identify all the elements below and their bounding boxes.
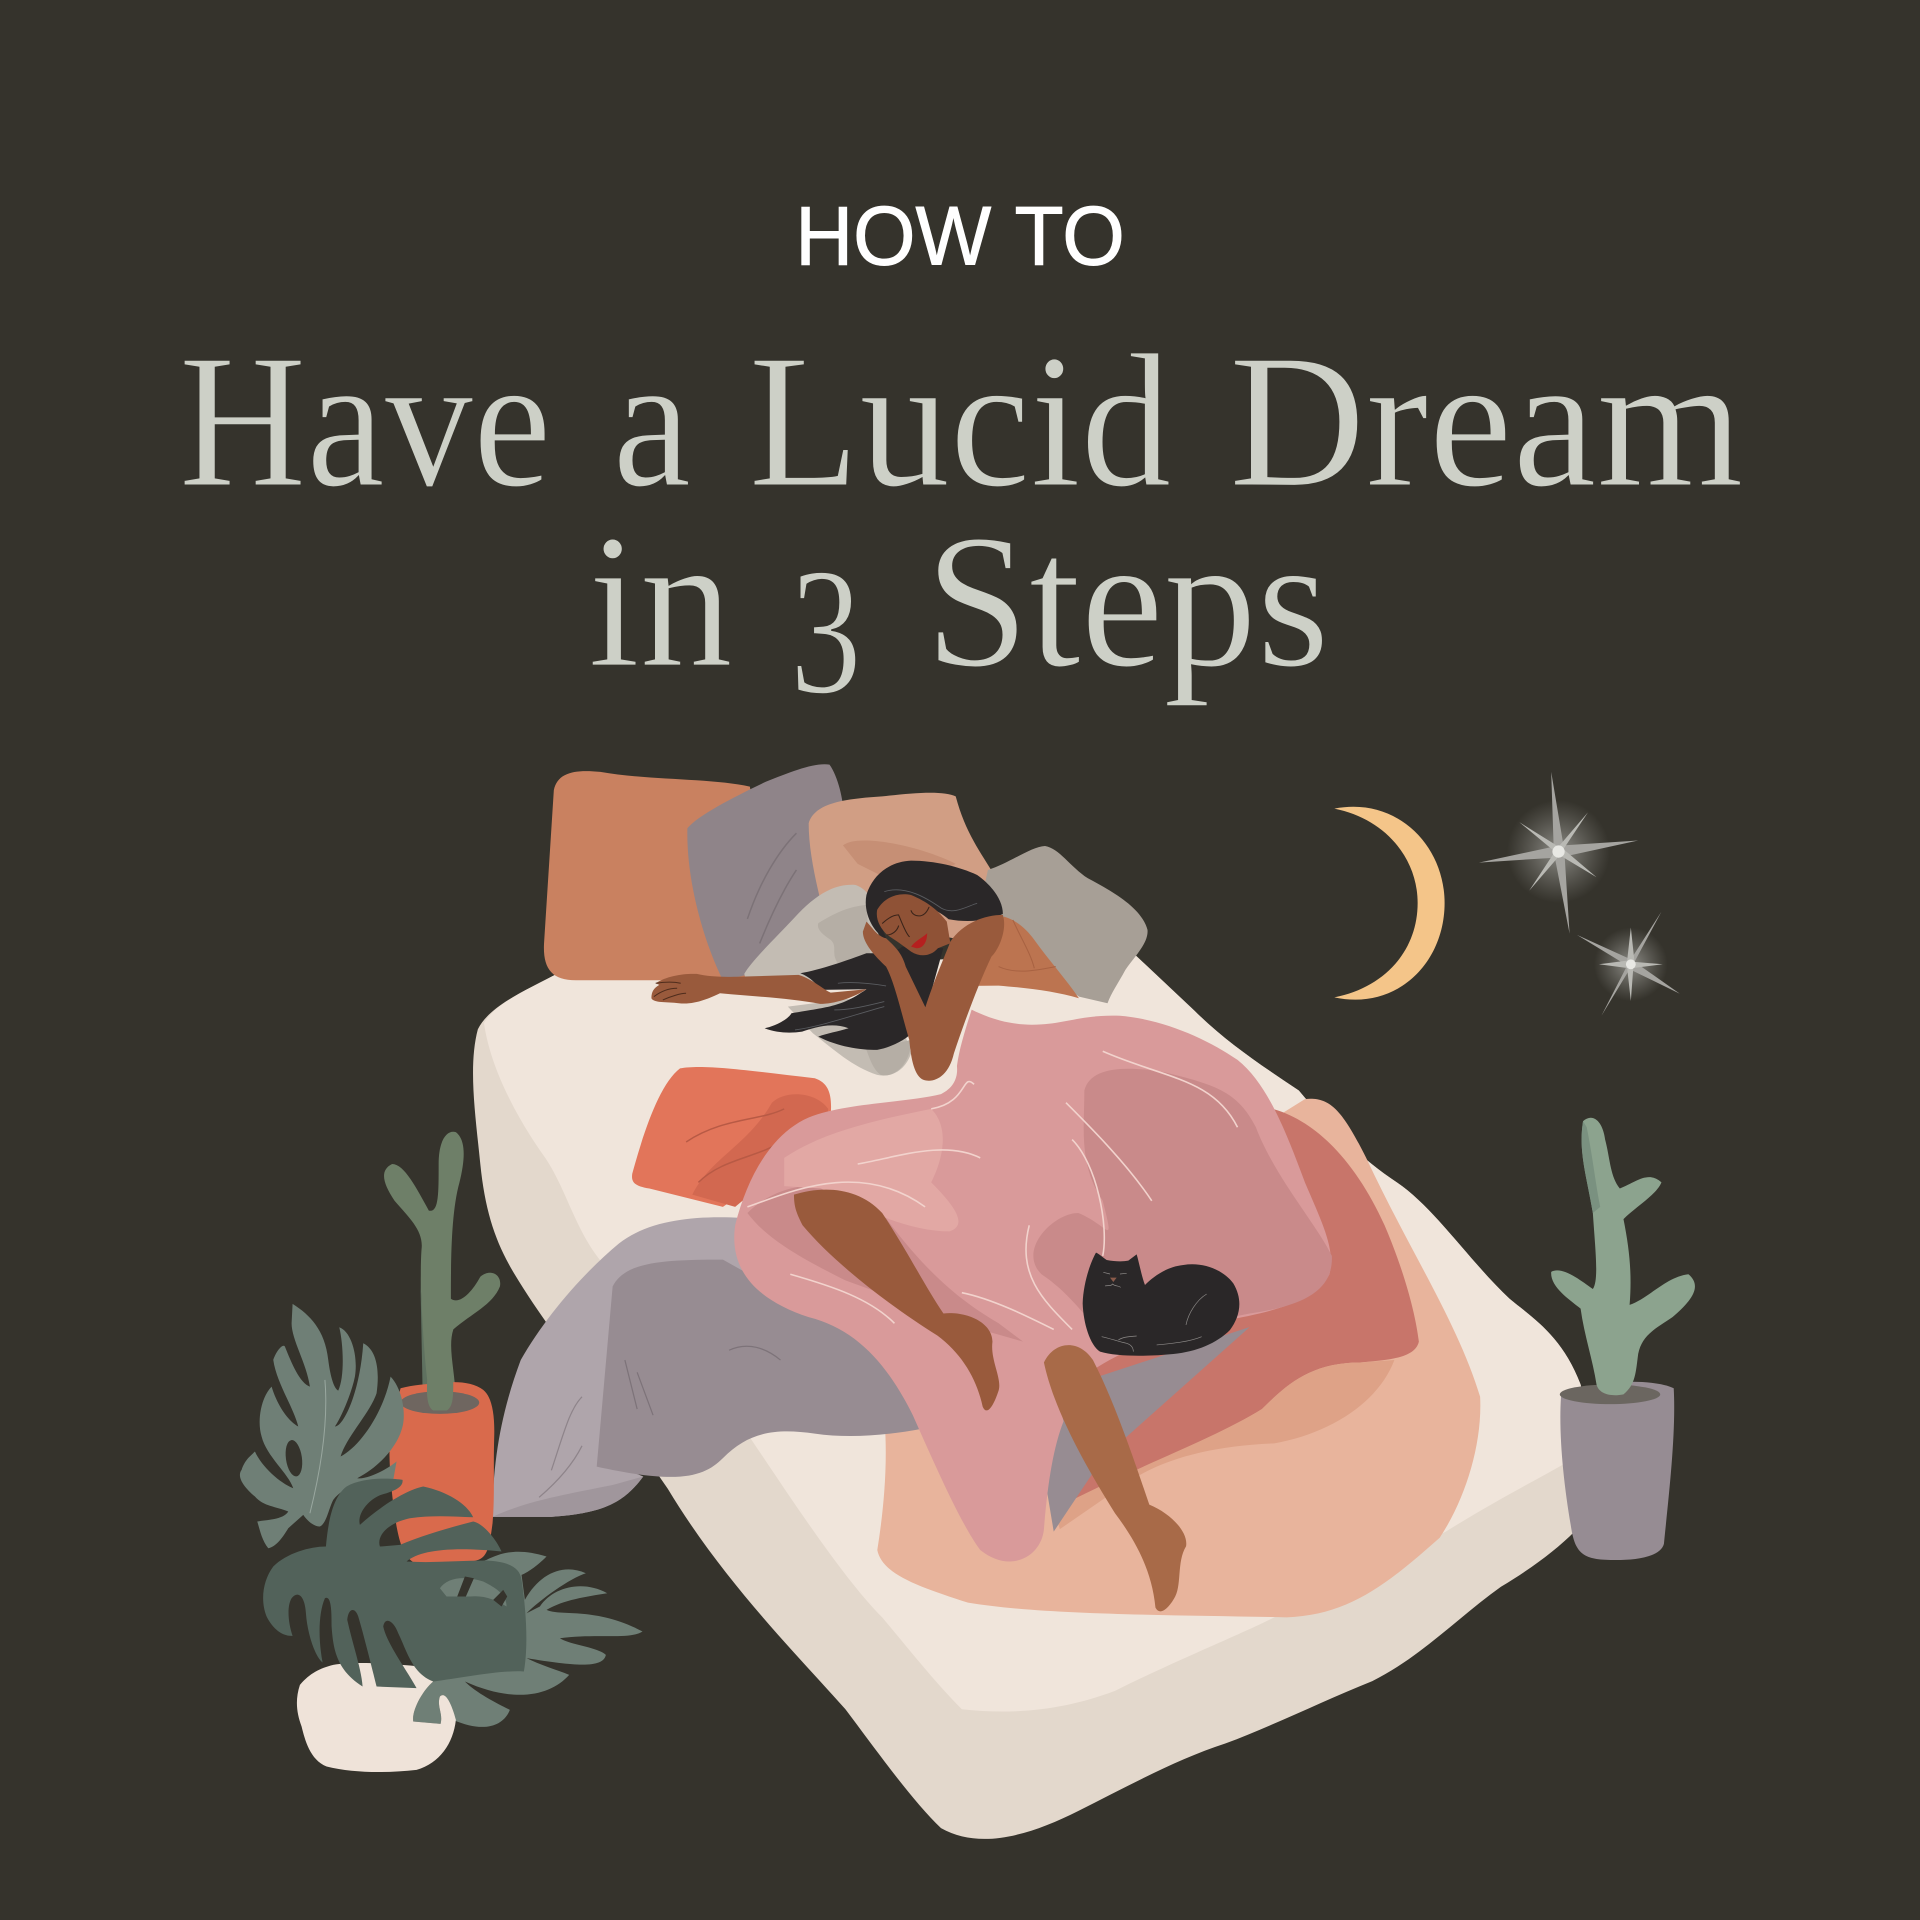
tan fold — [1054, 1360, 1394, 1529]
duvet pink — [734, 1010, 1331, 1561]
eyebrow: HOW TO: HOW — [795, 190, 992, 283]
cat — [1083, 1253, 1239, 1356]
pot: terracotta — [389, 1382, 494, 1565]
lower leg back — [1044, 1345, 1186, 1611]
grey blanket dark — [597, 1260, 1250, 1532]
face — [877, 894, 950, 955]
eyebrow: HOW TO — [795, 190, 1125, 283]
leaf: monstera right — [413, 1552, 643, 1727]
arms — [863, 915, 1004, 1081]
right cactus plant — [1551, 1118, 1695, 1560]
star small — [1577, 912, 1680, 1016]
cactus — [1551, 1118, 1695, 1395]
rose blanket — [1048, 1106, 1419, 1507]
title: Have — [179, 316, 551, 527]
title: 3 — [790, 531, 861, 732]
title: Steps — [925, 496, 1329, 707]
upper leg front — [794, 1190, 999, 1410]
title: a — [613, 316, 691, 527]
hair strands — [795, 983, 886, 1030]
title: Lucid — [749, 316, 1171, 527]
pot: grey — [1560, 1382, 1674, 1560]
star large — [1479, 772, 1638, 934]
title: in — [588, 496, 733, 707]
duvet shade — [1033, 1069, 1332, 1348]
bed mattress — [473, 953, 1585, 1839]
hair top — [866, 861, 1003, 940]
grey blanket light — [493, 1217, 784, 1517]
title — [179, 316, 1744, 732]
duvet folds — [747, 1051, 1238, 1329]
pillow: red accent — [632, 1067, 831, 1207]
facial features — [883, 907, 929, 937]
pillow: light grey — [744, 885, 891, 983]
title: Dream — [1229, 316, 1744, 527]
leaf: monstera back left — [240, 1304, 404, 1548]
hair back — [765, 947, 943, 1050]
left cactus — [384, 1132, 500, 1415]
reclining figure group — [651, 846, 1148, 1081]
leaf: monstera front dark — [263, 1479, 526, 1688]
torso — [972, 917, 1079, 998]
pot: white — [297, 1663, 456, 1772]
duvet highlight — [784, 1109, 958, 1231]
left plants group — [240, 1304, 643, 1772]
pillow: mauve grey — [687, 764, 844, 980]
pillow: orange — [544, 771, 784, 980]
eyebrow: HOW TO: TO — [1015, 190, 1125, 283]
peach blanket — [877, 1099, 1480, 1617]
pillow: peach — [809, 793, 995, 943]
pillow: warm grey — [977, 846, 1148, 1003]
moon — [1334, 807, 1445, 1000]
